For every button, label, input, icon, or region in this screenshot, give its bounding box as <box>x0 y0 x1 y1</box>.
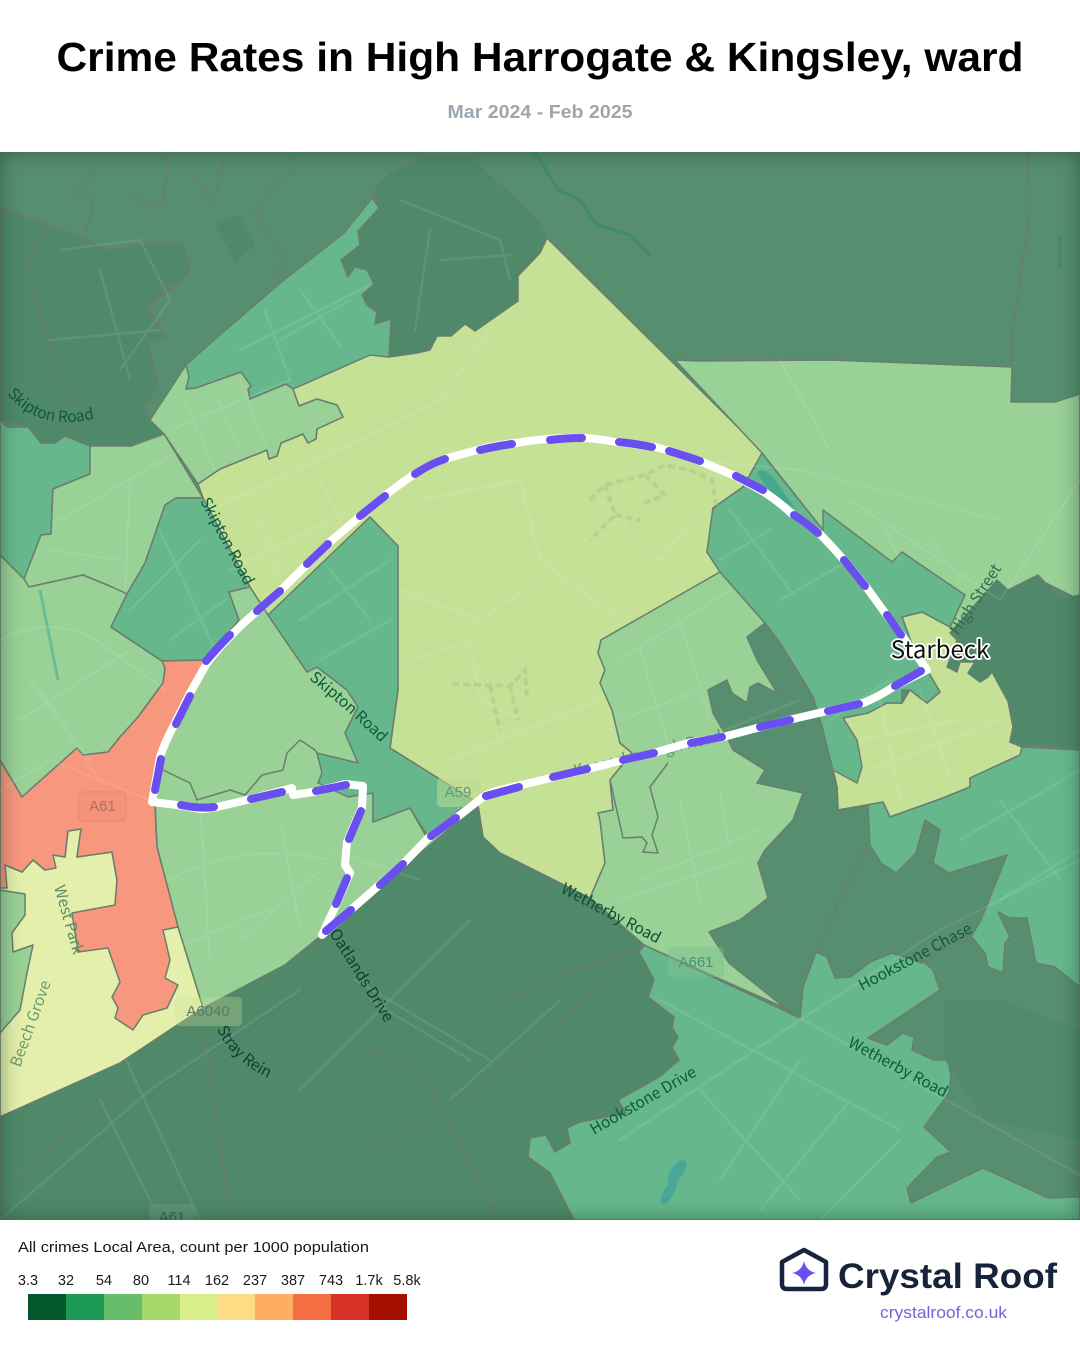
road labels: Stray Rein <box>218 1026 270 1078</box>
road shield: A661: A661 <box>678 954 714 971</box>
area: south dark block <box>0 805 679 1220</box>
area: west mid green strip <box>0 419 90 579</box>
area: east dark block <box>947 575 1080 750</box>
district boundaries, darker patches and water <box>0 152 1080 1220</box>
road labels: Knaresborough Road <box>571 724 724 781</box>
legend tick labels: 54 <box>96 1273 112 1289</box>
road labels: Hookstone Drive <box>586 1060 700 1139</box>
area: pond <box>757 470 795 508</box>
area: lower-right mid green <box>528 747 1080 1220</box>
area: mid green Starbeck block <box>707 453 965 783</box>
legend tick labels: 743 <box>319 1273 343 1289</box>
legend tick labels: 32 <box>58 1273 74 1289</box>
area: light green west of route <box>155 587 478 1008</box>
legend tick labels: 3.3 <box>18 1273 38 1289</box>
footpath clusters <box>452 465 716 730</box>
area: Skipton Road light green <box>150 365 343 484</box>
legend tick labels: 1.7k <box>355 1273 383 1289</box>
area: west light green <box>24 434 203 594</box>
road labels: Wetherby Road <box>845 1031 952 1102</box>
area: central dark strip <box>708 623 1007 1018</box>
ward boundary: white route <box>152 438 927 935</box>
area: north-west mid green <box>186 198 391 399</box>
area: far-west light green <box>0 555 165 797</box>
legend tick labels: 387 <box>281 1273 305 1289</box>
legend tick labels: 80 <box>133 1273 149 1289</box>
road labels: West Park <box>49 882 90 957</box>
area: south-east dark block <box>868 912 1080 1203</box>
area: north-west dark block <box>343 156 548 312</box>
legend colour scale <box>28 1294 407 1320</box>
area: north-east light green <box>675 360 1080 630</box>
title: Crime Rates in High Harrogate & Kingsley, ward <box>56 34 1024 80</box>
area: centre-south light green <box>590 572 838 1008</box>
road shield: A6040 <box>175 997 242 1026</box>
logo: Crystal Roof <box>782 1250 1057 1322</box>
road labels <box>8 388 1002 1134</box>
road shield: A661 <box>668 947 724 977</box>
legend tick labels: 237 <box>243 1273 267 1289</box>
brand name: Crystal Roof <box>838 1257 1057 1296</box>
area: mid green by Skipton Road <box>111 498 250 661</box>
road labels: Hookstone Chase <box>854 917 976 995</box>
legend <box>18 1240 421 1320</box>
area: Starbeck yellow-green <box>833 612 1022 817</box>
area: mid green wedge <box>268 517 473 835</box>
area: main yellow-green neighbourhood <box>198 238 763 898</box>
road shield: A59 <box>437 778 481 807</box>
road labels: High Street <box>944 559 1006 639</box>
road labels: Beech Grove <box>4 977 56 1070</box>
area: south-west light green sliver <box>0 890 33 1033</box>
road shield: A61 south <box>149 1204 196 1220</box>
place label: Starbeck: Starbeck <box>891 630 989 665</box>
area: salmon high-crime centre <box>0 660 205 1030</box>
legend tick labels: 162 <box>205 1273 229 1289</box>
area: pale yellow west <box>0 829 203 1117</box>
ward boundary: purple dashes <box>155 438 921 931</box>
road shield: A59: A59 <box>445 784 471 801</box>
road labels: Skipton Road <box>196 493 260 589</box>
road shield: A6040: A6040 <box>186 1003 230 1020</box>
legend tick labels: 114 <box>167 1273 191 1289</box>
brand url: crystalroof.co.uk <box>880 1304 1008 1322</box>
legend tick labels: 5.8k <box>393 1273 421 1289</box>
road labels: Skipton Road <box>8 388 94 422</box>
road shield: A61: A61 <box>89 798 116 815</box>
area: west dark block <box>0 208 191 446</box>
road labels: Skipton Road <box>310 672 389 742</box>
legend tick labels <box>18 1273 421 1289</box>
faint street network <box>0 200 1080 1220</box>
subtitle: date range: Mar 2024 - Feb 2025 <box>448 102 632 122</box>
road labels: Wetherby Road <box>558 877 665 948</box>
road shield: A61 <box>79 792 126 821</box>
road labels: Oatlands Drive <box>325 924 400 1026</box>
road shield: A61 south: A61 <box>159 1209 185 1226</box>
legend title: All crimes Local Area, count per 1000 population <box>18 1240 369 1256</box>
icon: house with star <box>782 1250 826 1289</box>
